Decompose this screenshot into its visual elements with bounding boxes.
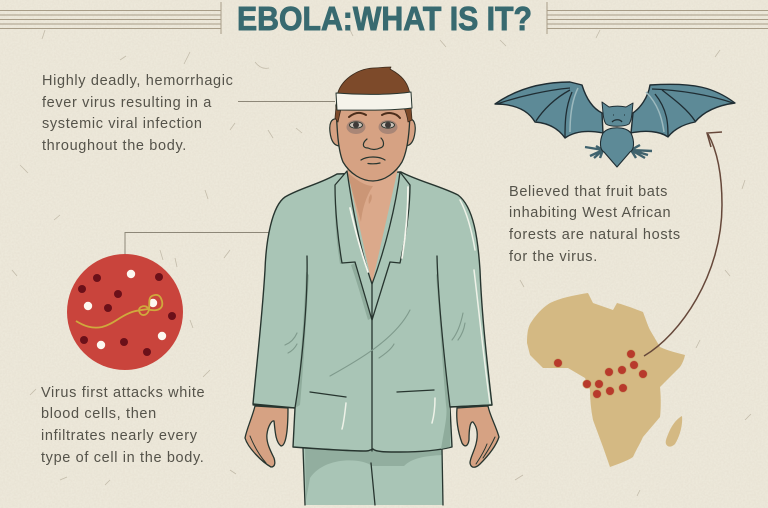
headband — [336, 92, 412, 110]
text block: white blood cells — [41, 385, 205, 466]
chest shadow and highlight — [347, 172, 373, 222]
icon: infected blood cell — [67, 254, 183, 370]
bat wings — [495, 82, 735, 138]
text block: virus description: fever virus resulting in a — [42, 95, 212, 111]
leader line: description to head — [238, 100, 335, 102]
jacket shading — [295, 190, 450, 449]
map: Africa — [527, 293, 685, 467]
lapel white edges — [350, 187, 408, 272]
hair — [335, 67, 412, 122]
title bar: EBOLA:WHAT IS IT? — [237, 0, 532, 37]
text block: fruit bats: for the virus. — [509, 249, 598, 265]
map: Madagascar — [666, 416, 682, 447]
text block: fruit bats — [509, 184, 681, 265]
wing bones — [497, 88, 733, 137]
figure: sick man in hospital gown — [245, 67, 499, 505]
jacket fold lines — [285, 310, 465, 376]
bat feet — [585, 145, 652, 158]
jacket body — [253, 172, 492, 452]
lapels — [335, 171, 410, 320]
jacket highlights — [342, 200, 490, 429]
text block: virus description — [42, 73, 234, 154]
virus cells: dark red — [78, 273, 176, 356]
text block: virus description: systemic viral infection — [42, 116, 203, 132]
title bar — [0, 0, 768, 37]
text block: white blood cells: infiltrates nearly every — [41, 428, 198, 444]
eyes — [346, 120, 398, 134]
outbreak markers — [554, 350, 647, 398]
bat face — [612, 115, 625, 122]
nose — [363, 138, 384, 150]
left hand — [245, 406, 288, 467]
wing light strut — [570, 88, 664, 132]
bat head — [602, 102, 633, 126]
text block: virus description: throughout the body. — [42, 138, 187, 154]
left ear — [330, 119, 340, 146]
text block: virus description: Highly deadly, hemorrhagic — [42, 73, 234, 89]
hand finger lines — [250, 436, 495, 464]
trousers — [303, 446, 443, 505]
ebola virus strand — [76, 295, 162, 328]
text block: fruit bats: forests are natural hosts — [509, 227, 681, 243]
right ear — [405, 119, 415, 146]
mouth — [361, 157, 385, 164]
text block: white blood cells: Virus first attacks white — [41, 385, 205, 401]
head — [336, 105, 410, 181]
text block: white blood cells: type of cell in the body. — [41, 450, 204, 466]
bat body — [600, 128, 634, 167]
arrow: Africa to bat — [644, 132, 722, 356]
text block: white blood cells: blood cells, then — [41, 406, 157, 422]
text block: fruit bats: inhabiting West African — [509, 205, 671, 221]
leader line: blood cell to body — [125, 232, 276, 255]
white blood cells — [84, 270, 166, 349]
sleeve and body seams — [253, 256, 492, 451]
eyebrows — [349, 113, 400, 118]
icon: fruit bat — [495, 82, 735, 167]
right hand — [457, 406, 499, 467]
text block: fruit bats: Believed that fruit bats — [509, 184, 668, 200]
chest skin — [346, 164, 399, 284]
